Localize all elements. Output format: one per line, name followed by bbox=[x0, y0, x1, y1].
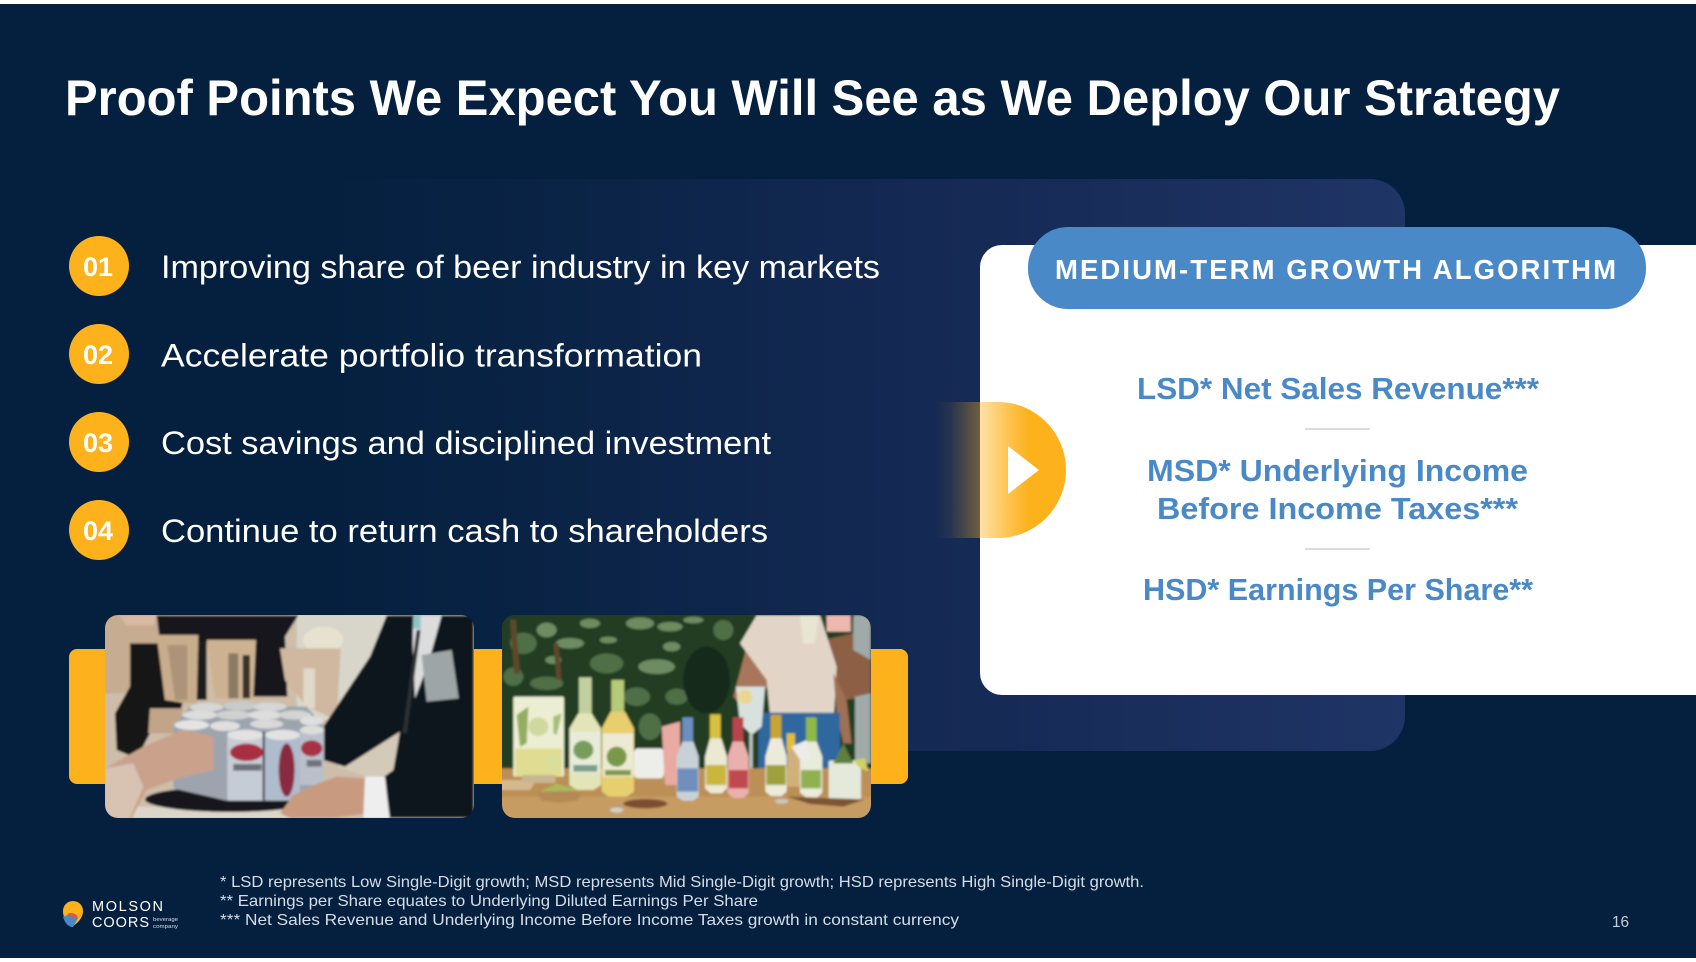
text: underlying income target bbox=[1147, 453, 1528, 526]
proof point 01: 01 bbox=[83, 252, 113, 282]
wine glass bbox=[736, 687, 765, 735]
proof point 04 bbox=[69, 500, 768, 560]
text: earnings per share target: HSD* Earnings Per Share** bbox=[1143, 572, 1534, 607]
people bbox=[823, 633, 871, 700]
proof point 03: Cost savings and disciplined investment bbox=[161, 425, 771, 461]
page number: 16 bbox=[1612, 914, 1629, 931]
table linen under tray bbox=[133, 807, 290, 818]
cans bbox=[173, 707, 324, 801]
logo: Molson Coors beverage company: COORS bbox=[92, 915, 149, 931]
proof point 04: Continue to return cash to shareholders bbox=[161, 513, 768, 549]
proof point 02 bbox=[69, 324, 702, 384]
footnotes: * LSD represents Low Single-Digit growth; MSD represents Mid Single-Digit growth; HSD represents High Single-Digit growth. bbox=[220, 874, 1144, 891]
pink glass bbox=[662, 722, 680, 785]
lime bowl bbox=[540, 796, 578, 802]
heading pill: medium-term growth algorithm bbox=[1028, 227, 1646, 309]
photo: Fever-Tree bottles on outdoor table bbox=[500, 613, 873, 822]
arrow: gradient play marker bbox=[935, 402, 1066, 538]
logo: Molson Coors beverage company: company bbox=[153, 924, 178, 930]
pitcher bbox=[513, 697, 564, 777]
text: underlying income target: Before Income Taxes*** bbox=[1157, 491, 1519, 526]
proof point 02: Accelerate portfolio transformation bbox=[161, 338, 702, 374]
panel: white growth algorithm card bbox=[980, 245, 1696, 695]
icon: logo mark bbox=[63, 901, 83, 927]
table bbox=[502, 766, 871, 798]
footnotes: *** Net Sales Revenue and Underlying Income Before Income Taxes growth in constant currency bbox=[220, 912, 959, 929]
background chairs and guests bbox=[103, 613, 160, 693]
left hand bbox=[105, 729, 213, 818]
logo: Molson Coors beverage company bbox=[63, 899, 178, 931]
list: proof points bbox=[69, 236, 880, 560]
amber bar behind photos bbox=[69, 649, 908, 784]
proof point 01: Improving share of beer industry in key markets bbox=[161, 249, 880, 285]
text: net sales revenue target: LSD* Net Sales Revenue*** bbox=[1137, 371, 1540, 406]
gap under sleeve bbox=[338, 732, 400, 776]
photo: server offering tray of Coors Light cans bbox=[103, 613, 477, 820]
large bottles bbox=[579, 677, 592, 714]
proof point 02: 02 bbox=[83, 340, 113, 370]
footnotes: ** Earnings per Share equates to Underlying Diluted Earnings Per Share bbox=[220, 893, 758, 910]
proof point 03 bbox=[69, 412, 771, 472]
proof point 04: 04 bbox=[83, 516, 113, 546]
panel: gradient backdrop bbox=[330, 179, 1405, 751]
tray bbox=[144, 788, 290, 814]
cocktail glass bbox=[829, 761, 861, 800]
logo: Molson Coors beverage company: MOLSON bbox=[92, 899, 163, 915]
text: underlying income target: MSD* Underlying Income bbox=[1147, 453, 1528, 488]
proof point 01 bbox=[69, 236, 880, 296]
heading pill: medium-term growth algorithm: MEDIUM-TERM GROWTH ALGORITHM bbox=[1055, 254, 1616, 285]
coasters bbox=[623, 799, 667, 808]
server jacket bbox=[323, 615, 474, 818]
small bottles bbox=[677, 717, 699, 801]
foliage highlights bbox=[537, 617, 703, 674]
proof point 03: 03 bbox=[83, 428, 113, 458]
logo: Molson Coors beverage company: beverage bbox=[153, 917, 178, 923]
title: Proof Points We Expect You Will See as We Deploy Our Strategy bbox=[65, 70, 1560, 126]
footnotes bbox=[220, 874, 1144, 929]
right hand bbox=[280, 777, 367, 818]
